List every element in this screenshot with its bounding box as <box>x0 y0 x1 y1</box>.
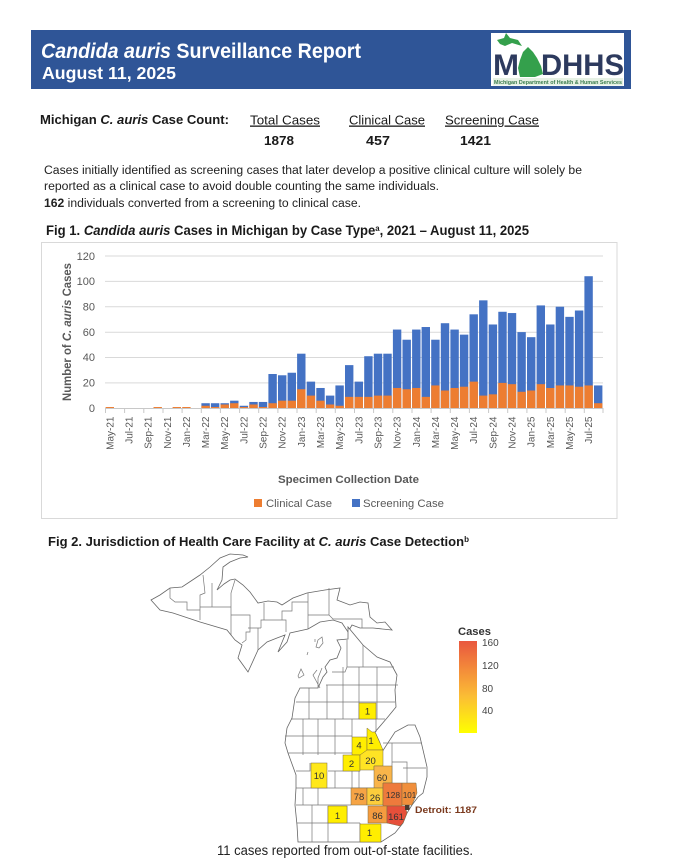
map legend: 40 <box>482 706 494 717</box>
upper peninsula <box>151 554 392 672</box>
y axis labels: 100 <box>77 276 95 288</box>
explanatory note <box>44 165 582 210</box>
heading: figure 2: b <box>464 535 469 544</box>
header banner <box>31 30 631 89</box>
map legend: 80 <box>482 684 494 695</box>
y axis title: Number of C. auris Cases <box>60 263 74 401</box>
x axis labels: Sep-21 <box>144 416 155 449</box>
map legend: Cases <box>458 626 491 638</box>
x axis labels: Sep-24 <box>488 416 499 449</box>
chart legend: Clinical Case <box>266 498 332 510</box>
map legend: 120 <box>482 661 499 672</box>
footnote: 11 cases reported from out-of-state facilities. <box>217 843 473 858</box>
x axis labels: May-22 <box>220 416 231 450</box>
x axis labels: May-23 <box>335 416 346 450</box>
total cases <box>250 112 321 148</box>
x axis labels: Mar-24 <box>431 416 442 448</box>
x axis labels: Jul-23 <box>354 416 365 444</box>
y axis labels: 120 <box>77 251 95 263</box>
y axis labels <box>77 251 95 415</box>
x axis labels: Jan-24 <box>412 416 423 447</box>
islands <box>298 637 323 688</box>
map: Michigan counties: 1 <box>368 736 374 747</box>
map: Michigan counties: 161 <box>388 812 404 823</box>
heading: figure 1: , 2021 – August 11, 2025 <box>380 223 529 238</box>
y axis labels: 0 <box>89 403 95 415</box>
lower peninsula <box>285 627 427 842</box>
report date: August 11, 2025 <box>42 63 176 83</box>
y axis labels: 40 <box>83 352 95 364</box>
x axis labels: Mar-22 <box>201 416 212 448</box>
bars: screening case <box>201 276 602 408</box>
explanatory note: reported as a clinical case to avoid double counting the same individuals. <box>44 181 439 193</box>
total cases: Total Cases <box>250 112 321 128</box>
x axis labels: Jul-25 <box>584 416 595 444</box>
map: Michigan counties: 101 <box>403 791 417 800</box>
heading: figure 1: a <box>375 224 380 233</box>
heading: figure 1: Fig 1. Candida auris Cases in Michigan by Case Type <box>46 223 382 238</box>
map: Michigan counties: 20 <box>365 756 376 767</box>
explanatory note: 162 individuals converted from a screening to clinical case. <box>44 198 361 210</box>
county boundaries <box>170 575 426 842</box>
icon: MDHHS logo: M <box>493 49 519 82</box>
icon: MDHHS logo: DHHS <box>541 49 624 82</box>
map legend <box>458 626 499 733</box>
map: Michigan counties: 26 <box>370 793 380 804</box>
panel: stacked bar chart <box>42 242 617 518</box>
clinical cases: 457 <box>366 133 390 148</box>
x axis labels: May-25 <box>565 416 576 450</box>
screening cases <box>445 112 539 148</box>
Detroit callout: Detroit: 1187 <box>415 805 477 816</box>
x axis labels: Mar-25 <box>546 416 557 448</box>
screening cases: Screening Case <box>445 112 539 128</box>
map: Michigan counties <box>151 554 477 842</box>
x axis title: Specimen Collection Date <box>278 474 419 486</box>
x axis labels: Sep-22 <box>258 416 270 449</box>
x axis labels: Nov-22 <box>278 416 289 449</box>
icon: MDHHS logo <box>491 33 624 86</box>
clinical cases <box>349 112 425 148</box>
map: Michigan counties: 2 <box>349 759 354 770</box>
map: Michigan counties: 4 <box>356 740 362 752</box>
x axis labels: Jul-22 <box>239 416 250 444</box>
clinical cases: Clinical Case <box>349 112 425 128</box>
y axis labels: 20 <box>83 378 95 390</box>
case count summary <box>40 112 539 148</box>
explanatory note: Cases initially identified as screening cases that later develop a positive clinical culture will solely be <box>44 165 582 177</box>
x axis labels: Jul-24 <box>469 416 480 444</box>
x axis labels <box>105 416 595 450</box>
bars: clinical case <box>106 382 602 408</box>
map: Michigan counties: 1 <box>367 828 372 839</box>
chart legend: Screening Case <box>363 498 444 510</box>
y axis labels: 80 <box>83 302 95 314</box>
icon: MDHHS logo: Michigan Department of Health & Human Services <box>494 80 622 86</box>
x axis labels: Mar-23 <box>316 416 327 448</box>
filled counties with case counts <box>311 703 417 842</box>
x axis labels: May-24 <box>450 416 461 450</box>
total cases: 1878 <box>264 133 294 148</box>
x axis labels: May-21 <box>105 416 116 450</box>
x axis labels: Nov-24 <box>508 416 518 449</box>
screening cases: 1421 <box>460 133 491 148</box>
map: Michigan counties: 10 <box>314 771 324 782</box>
map: Michigan counties: 1 <box>365 706 370 718</box>
map: Michigan counties: 86 <box>372 811 383 822</box>
map legend: 160 <box>482 638 499 649</box>
x axis labels: Sep-23 <box>374 416 384 449</box>
map: Michigan counties: 60 <box>377 773 387 784</box>
map: Michigan counties: 128 <box>386 790 400 800</box>
heading: figure 2: Fig 2. Jurisdiction of Health Care Facility at C. auris Case Detection <box>48 534 464 549</box>
title: Candida auris Surveillance Report <box>41 40 361 63</box>
x axis labels: Jan-23 <box>297 416 308 447</box>
x axis labels: Nov-23 <box>393 416 404 449</box>
x axis labels: Jan-25 <box>527 416 538 447</box>
x axis labels: Nov-21 <box>163 416 174 449</box>
x axis labels: Jul-21 <box>124 416 136 444</box>
case count label: Michigan C. auris Case Count: <box>40 112 229 127</box>
x axis labels: Jan-22 <box>182 416 193 447</box>
chart legend <box>254 498 444 510</box>
y axis labels: 60 <box>83 327 95 339</box>
map: Michigan counties: 78 <box>354 792 364 803</box>
map: Michigan counties: 1 <box>335 811 340 822</box>
